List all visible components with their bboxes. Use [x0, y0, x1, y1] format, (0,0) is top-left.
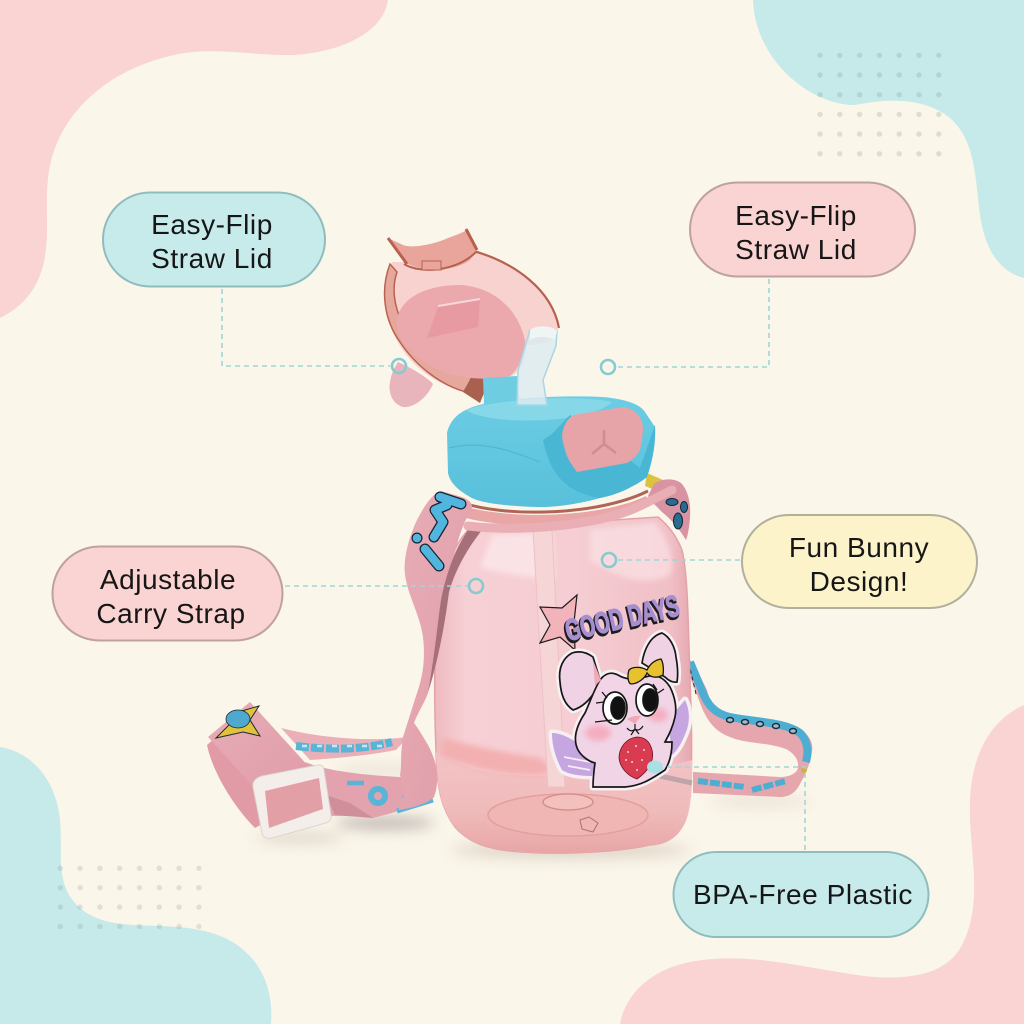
inner ear — [593, 660, 601, 686]
inner strap shadow — [428, 530, 482, 692]
body shell — [435, 517, 692, 853]
lashes and brow — [595, 684, 664, 722]
button mark — [592, 430, 616, 454]
brown neck line — [463, 491, 648, 512]
neck fill — [463, 496, 650, 525]
lower strap — [305, 762, 436, 818]
bottle body — [435, 491, 692, 853]
callout: bpa-free plastic: BPA-Free Plastic — [693, 879, 913, 910]
connector: carry strap — [285, 579, 483, 593]
print on thin strap — [296, 742, 392, 749]
left wing — [552, 733, 596, 776]
bottle lid — [385, 229, 559, 407]
fin — [427, 300, 480, 338]
callout: easy-flip straw lid left: Straw Lid — [151, 243, 273, 274]
blob: bottom-right pink — [620, 705, 1024, 1024]
connector: straw lid left — [222, 289, 406, 373]
lower strap print — [347, 783, 433, 811]
cap shell — [447, 396, 655, 507]
hinge — [463, 376, 486, 403]
callout: easy-flip straw lid right: Straw Lid — [735, 234, 857, 265]
nose and mouth — [627, 716, 641, 724]
water band — [441, 738, 549, 775]
connector: plastic — [663, 767, 805, 850]
eyes — [603, 684, 658, 724]
lettering shadow: GOOD DAYS — [561, 592, 682, 650]
dot grid: bottom left — [57, 865, 203, 929]
strap print top — [417, 497, 461, 566]
wing lines — [564, 757, 590, 770]
back fold — [207, 738, 278, 828]
callout: bpa-free plastic — [674, 852, 928, 937]
star print — [216, 706, 260, 738]
buckle — [253, 765, 331, 838]
lid rim band — [385, 264, 472, 392]
sticker: good days — [540, 590, 683, 650]
lower strap shade — [326, 795, 373, 818]
blob: top-left pink — [0, 0, 388, 318]
star — [540, 595, 577, 650]
callout: easy-flip straw lid right: Easy-Flip — [735, 200, 857, 231]
connector: bunny design — [602, 553, 740, 567]
connector: straw lid right — [601, 279, 769, 374]
lower transparent base — [436, 752, 692, 853]
right ear — [642, 633, 678, 682]
small pull tab — [390, 362, 433, 407]
marker: plastic — [647, 760, 663, 774]
right wing — [668, 700, 689, 755]
dot grid: top right — [817, 52, 942, 157]
sticker: bunny — [552, 633, 689, 787]
callout: adjustable carry strap: Adjustable — [100, 564, 236, 595]
inner disc — [397, 285, 525, 379]
main long strap — [398, 491, 472, 810]
blob: bottom-left blue — [0, 747, 271, 1024]
spout — [517, 330, 557, 405]
bottle cap — [447, 326, 655, 507]
front strap fold — [208, 702, 310, 792]
lock frame — [543, 415, 655, 498]
left strap — [207, 473, 690, 838]
callout: easy-flip straw lid left — [103, 192, 325, 286]
button — [562, 407, 643, 472]
strap seen through bottle — [660, 776, 692, 783]
upper right strap — [645, 473, 690, 540]
inner straw — [533, 530, 565, 787]
lettering: GOOD DAYS — [562, 590, 683, 648]
collar loop — [468, 490, 672, 528]
base mould mark — [580, 817, 598, 832]
callout: fun bunny design — [742, 515, 977, 608]
callout: fun bunny design: Fun Bunny — [789, 532, 929, 563]
upper highlights — [480, 532, 555, 578]
lid tab — [388, 230, 477, 269]
thin back strap — [281, 728, 408, 760]
callout: fun bunny design: Design! — [810, 566, 908, 597]
callout: easy-flip straw lid right — [690, 182, 915, 276]
strawberry — [619, 737, 653, 779]
blush — [585, 725, 611, 741]
ground shadow — [255, 765, 810, 859]
callout: easy-flip straw lid left: Easy-Flip — [151, 209, 273, 240]
left ear — [560, 652, 600, 710]
base nub — [543, 794, 593, 810]
lid top edge — [470, 250, 559, 328]
blob: top-right blue — [753, 0, 1024, 278]
white backing — [552, 633, 689, 787]
cap top — [466, 398, 612, 420]
callout: adjustable carry strap — [52, 546, 282, 640]
base ring — [488, 794, 648, 836]
lid interior — [385, 250, 558, 392]
bow — [628, 659, 663, 684]
right strap — [688, 657, 812, 797]
cap stub — [483, 376, 520, 404]
cap contour — [449, 445, 540, 462]
head and body — [575, 673, 676, 787]
callout: adjustable carry strap: Carry Strap — [96, 598, 246, 629]
